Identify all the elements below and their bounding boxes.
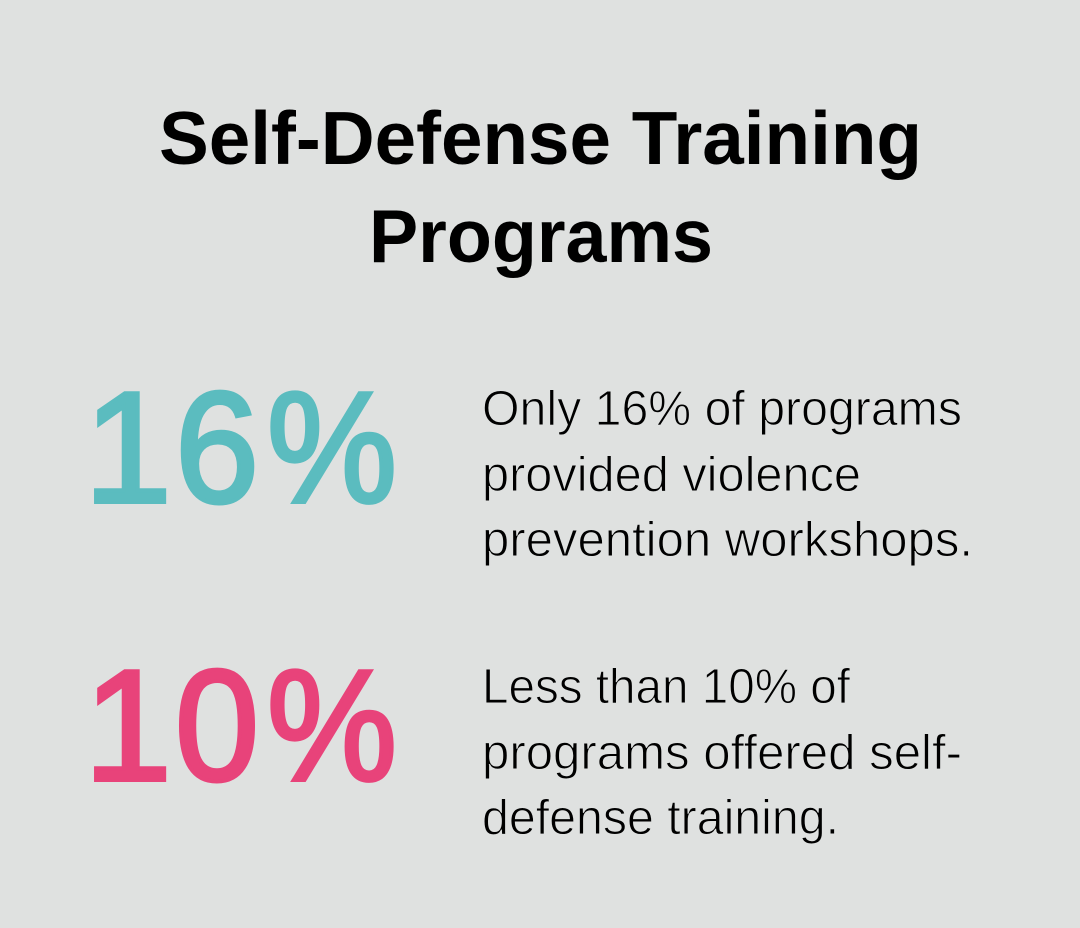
title: Programs [369,194,713,278]
description: violence prevention workshops: Only 16% of programs [482,381,962,436]
stat: 16% [84,360,973,567]
number: 16%: 1 [84,360,172,536]
number: 16%: 6 [175,360,259,536]
description: self-defense training [482,659,962,845]
number: 16% [84,360,397,536]
description: self-defense training: defense training. [482,790,839,845]
description: violence prevention workshops [482,381,973,567]
description: self-defense training: programs offered self- [482,725,962,780]
number: 10%: % [267,638,397,814]
number: 10%: 0 [175,638,259,814]
title [159,96,922,278]
number: 10%: 1 [84,638,172,814]
description: violence prevention workshops: prevention workshops. [482,512,973,567]
stat: 10% [84,638,962,845]
description: self-defense training: Less than 10% of [482,659,850,714]
title: Self-Defense Training [159,96,922,180]
description: violence prevention workshops: provided violence [482,447,861,502]
number: 10% [84,638,397,814]
number: 16%: % [267,360,397,536]
